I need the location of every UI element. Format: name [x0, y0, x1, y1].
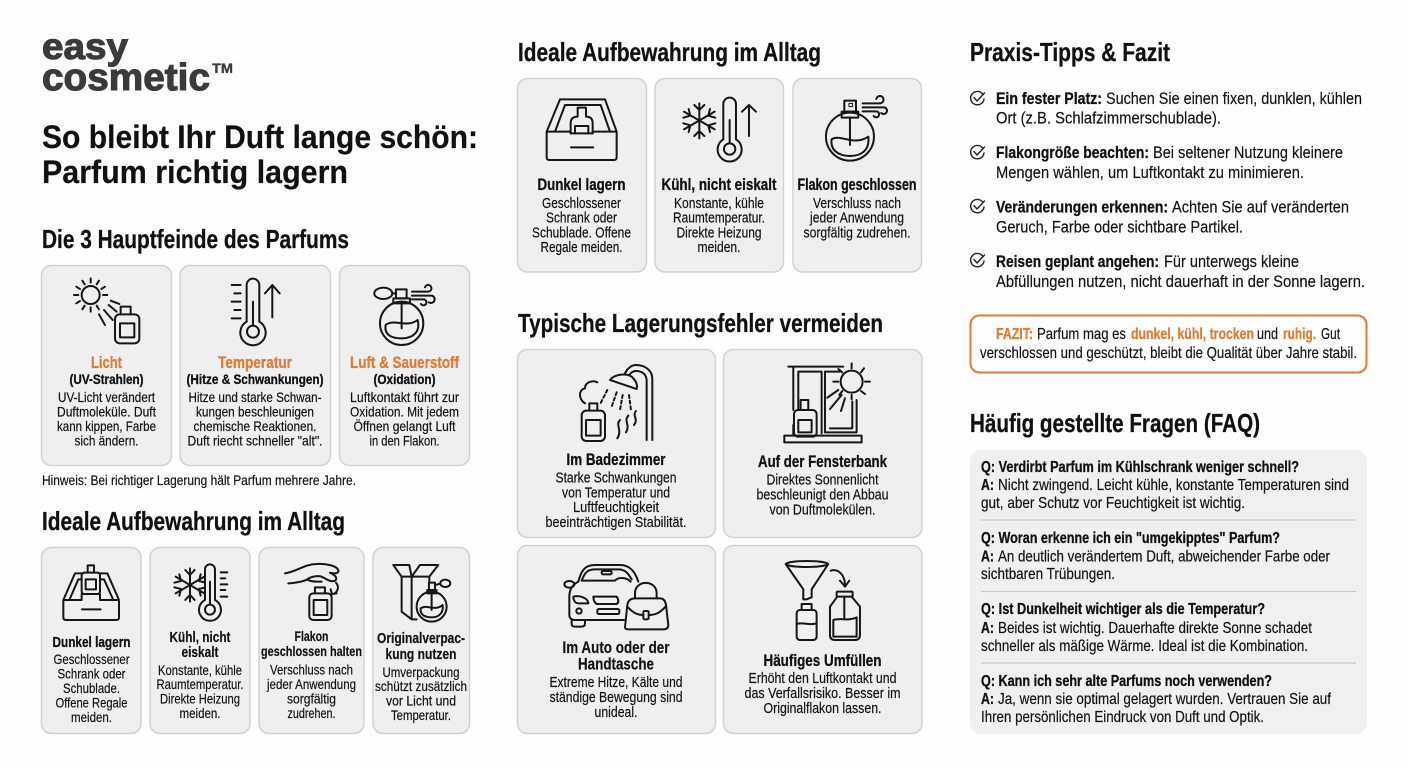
text: Luftkontakt führt zur	[350, 389, 459, 405]
tip: Ein fester Platz	[971, 89, 1362, 128]
heading: Originalverpac-	[377, 630, 465, 647]
icon: car and handbag	[564, 565, 668, 629]
heading: Kühl, nicht eiskalt	[662, 176, 777, 194]
note: Hinweis: Bei richtiger Lagerung hält Parfum mehrere Jahre.	[42, 473, 356, 488]
panel: Licht	[42, 266, 172, 466]
text: in den Flakon.	[370, 432, 440, 448]
text: sorgfältig zudrehen.	[804, 224, 910, 242]
text	[188, 389, 322, 448]
text: schützt zusätzlich	[375, 678, 467, 694]
faq item 2	[981, 530, 1331, 583]
text: meiden.	[71, 709, 112, 725]
faq item 1: Nicht zwingend. Leicht kühle, konstante Temperaturen sind	[998, 477, 1349, 494]
faq item 3: schneller als mäßige Wärme. Ideal ist die Kombination.	[981, 638, 1308, 655]
logo: easy	[42, 26, 128, 67]
tip: Veränderungen: Geruch, Farbe oder sichtbare Partikel.	[996, 218, 1243, 236]
text: Geschlossener	[542, 195, 621, 212]
icon: box and perfume	[393, 565, 450, 622]
faq item 1: A:	[981, 477, 994, 494]
icon: check	[971, 91, 984, 105]
text	[756, 472, 888, 518]
text: jeder Anwendung	[809, 210, 904, 226]
text: Extreme Hitze, Kälte und	[550, 674, 682, 691]
text: Regale meiden.	[540, 239, 622, 256]
faq item 2: An deutlich verändertem Duft, abweichender Farbe oder	[998, 548, 1331, 566]
heading: Handtasche	[578, 654, 654, 674]
text: zudrehen.	[288, 705, 336, 721]
text: von Temperatur und	[562, 484, 670, 502]
icon: shower and bottle	[580, 365, 652, 441]
text: Umverpackung	[382, 664, 460, 680]
panel: Originalverpackung nutzen	[373, 548, 470, 734]
text	[673, 195, 765, 256]
faq item 4	[981, 673, 1331, 726]
icon: check	[971, 199, 984, 213]
text: Direkte Heizung	[676, 224, 762, 242]
faq item 4: A:	[981, 691, 994, 708]
faq item 2: sichtbaren Trübungen.	[981, 566, 1115, 583]
text: sorgfältig	[287, 690, 336, 706]
panel: Dunkel lagern middle	[518, 78, 646, 272]
icon: snowflake and thermometer	[174, 564, 227, 621]
text: Oxidation. Mit jedem	[350, 404, 459, 420]
tip: Reisen	[971, 252, 1365, 291]
text: Konstante, kühle	[158, 662, 242, 678]
heading	[261, 628, 362, 659]
faq item 1: gut, aber Schutz vor Feuchtigkeit ist wichtig.	[981, 495, 1245, 512]
panel: Kühl, nicht eiskalt	[150, 548, 250, 734]
panel: Auf der Fensterbank	[724, 350, 922, 538]
text: vor Licht und	[386, 692, 456, 708]
heading: Die 3 Hauptfeinde: Die 3 Hauptfeinde des Parfums	[42, 224, 349, 254]
text: Offene Regale	[56, 694, 128, 710]
panel: FAQ	[970, 450, 1367, 734]
subheading: (Hitze & Schwankungen)	[186, 371, 324, 387]
faq item 4: Ja, wenn sie optimal gelagert wurden. Vertrauen Sie auf	[998, 691, 1331, 708]
text: Starke Schwankungen	[556, 470, 676, 486]
faq item 3: A:	[981, 620, 994, 637]
icon: check	[971, 253, 984, 267]
text	[532, 195, 631, 256]
tip: Flakongröße	[971, 143, 1343, 182]
panel: Flakon geschlossen	[793, 78, 922, 272]
text: Öffnen gelangt Luft	[354, 417, 456, 434]
faq item 1	[981, 459, 1349, 512]
heading: Dunkel lagern	[52, 634, 130, 651]
heading: Licht: Licht	[91, 354, 122, 372]
faq item 2: Q: Woran erkenne ich ein "umgekipptes" Parfum?	[981, 530, 1280, 547]
text	[375, 664, 467, 723]
text	[54, 651, 130, 725]
heading: Ideale Aufbewahrung left: Ideale Aufbewahrung im Alltag	[42, 506, 345, 536]
tip: Ein fester Platz: Suchen Sie einen fixen, dunklen, kühlen	[1106, 89, 1362, 108]
text	[546, 470, 686, 531]
subheading: (Oxidation)	[374, 371, 436, 387]
icon: hand closing bottle	[285, 564, 338, 620]
title: Parfum richtig lagern	[42, 154, 348, 190]
heading: Im Badezimmer	[566, 450, 666, 469]
text: Schrank oder	[58, 666, 126, 682]
heading: kung nutzen	[386, 646, 456, 663]
text: Verschluss nach	[813, 195, 901, 212]
heading: Kühl, nicht	[170, 629, 230, 646]
callout: Fazit	[970, 316, 1366, 372]
heading: Praxis-Tipps: Praxis-Tipps & Fazit	[970, 37, 1170, 67]
heading: Auf der Fensterbank	[758, 452, 887, 471]
icon: sun and bottle	[74, 278, 139, 343]
text: sich ändern.	[74, 432, 138, 448]
text: Schrank oder	[546, 210, 617, 226]
text	[266, 662, 356, 721]
heading	[562, 638, 670, 674]
text: Direktes Sonnenlicht	[766, 472, 879, 488]
heading: Dunkel lagern	[538, 176, 626, 194]
faq item 4: Ihren persönlichen Eindruck von Duft und Optik.	[981, 709, 1264, 726]
icon: window sill with sun	[784, 363, 870, 442]
text: meiden.	[180, 705, 220, 721]
text: ständige Bewegung sind	[550, 689, 682, 706]
faq item 3: Q: Ist Dunkelheit wichtiger als die Temperatur?	[981, 601, 1265, 618]
heading: Häufiges Umfüllen	[764, 651, 882, 670]
subheading: (UV-Strahlen)	[70, 371, 144, 387]
callout: Fazit: Gut	[1321, 326, 1340, 343]
text: Erhöht den Luftkontakt und	[748, 670, 896, 687]
text: das Verfallsrisiko. Besser im	[744, 685, 900, 702]
text	[804, 195, 910, 242]
tip: Flakongröße: Bei seltener Nutzung kleinere	[1153, 143, 1343, 162]
title: So bleibt Ihr Duft lange schön:	[42, 119, 478, 155]
panel: Flakon geschlossen halten	[259, 548, 364, 734]
text: UV-Licht verändert	[58, 389, 155, 405]
text: meiden.	[698, 239, 740, 256]
text: kungen beschleunigen	[196, 404, 314, 420]
heading: Flakon geschlossen	[798, 176, 916, 194]
text: von Duftmolekülen.	[770, 502, 876, 518]
heading: Flakon	[294, 628, 328, 644]
text	[57, 389, 156, 448]
heading: eiskalt	[182, 644, 219, 661]
panel: Luft und Sauerstoff	[340, 266, 470, 466]
faq item 3	[981, 601, 1312, 655]
panel: Temperatur	[180, 266, 330, 466]
text: kann kippen, Farbe	[57, 418, 156, 434]
logo	[42, 26, 233, 99]
text: Duft riecht schneller "alt".	[188, 432, 322, 448]
tip: Flakongröße: Mengen wählen, um Luftkontakt zu minimieren.	[996, 163, 1304, 182]
callout: Fazit: dunkel, kühl, trocken	[1131, 326, 1254, 343]
text: jeder Anwendung	[266, 676, 356, 692]
logo: cosmetic	[42, 57, 210, 99]
text	[350, 389, 459, 448]
text: Verschluss nach	[270, 662, 353, 678]
faq item 2: A:	[981, 548, 994, 566]
tip: Ein fester Platz: Ein fester Platz:	[996, 89, 1102, 108]
callout: Fazit: FAZIT:	[996, 326, 1033, 343]
heading: Temperatur: Temperatur	[218, 354, 292, 372]
icon: thermometer rising	[232, 279, 280, 345]
panel: Im Auto oder der Handtasche	[518, 546, 716, 734]
text: Schublade. Offene	[532, 224, 631, 242]
text: Duftmoleküle. Duft	[57, 404, 156, 420]
panel: Im Badezimmer	[518, 350, 716, 538]
text: chemische Reaktionen.	[194, 418, 316, 434]
icon: perfume with airflow	[826, 96, 887, 161]
tip: Reisen: Für unterwegs kleine	[1164, 252, 1299, 271]
panel: Dunkel lagern	[42, 548, 141, 734]
heading: Im Auto oder der	[562, 638, 670, 657]
text: unideal.	[594, 704, 638, 721]
icon: snowflake thermometer arrow	[683, 98, 756, 162]
heading: geschlossen halten	[261, 643, 362, 659]
tip: Flakongröße: Flakongröße beachten:	[996, 143, 1149, 162]
tip: Ein fester Platz: Ort (z.B. Schlafzimmerschublade).	[996, 108, 1221, 128]
faq item 3: Beides ist wichtig. Dauerhafte direkte Sonne schadet	[998, 620, 1312, 637]
text: Raumtemperatur.	[673, 210, 765, 226]
heading: Ideale Aufbewahrung middle: Ideale Aufbewahrung im Alltag	[518, 37, 821, 67]
panel: Häufiges Umfüllen	[724, 546, 922, 734]
heading	[377, 630, 465, 663]
text: Konstante, kühle	[674, 195, 764, 212]
text: Hitze und starke Schwan-	[188, 389, 322, 405]
text: beeinträchtigen Stabilität.	[546, 514, 686, 531]
callout: Fazit: Parfum mag es	[1037, 326, 1126, 343]
icon: drawer with bottle	[547, 99, 617, 160]
text: Raumtemperatur.	[156, 676, 244, 692]
text: Temperatur.	[391, 707, 451, 723]
logo: TM	[212, 60, 233, 76]
text: Schublade.	[63, 680, 120, 696]
panel: Kühl, nicht eiskalt middle	[655, 78, 784, 272]
text: Geschlossener	[54, 651, 130, 667]
tip: Veränderungen: Achten Sie auf veränderten	[1172, 198, 1349, 216]
icon: perfume atomizer	[374, 285, 435, 345]
text	[744, 670, 900, 717]
text: Originalflakon lassen.	[764, 700, 882, 717]
tip: Veränderungen	[971, 198, 1349, 236]
text	[156, 662, 244, 721]
title	[42, 119, 478, 190]
text: Luftfeuchtigkeit	[573, 499, 660, 516]
heading: FAQ: Häufig gestellte Fragen (FAQ)	[970, 408, 1260, 438]
tip: Reisen: Reisen geplant angehen:	[996, 252, 1159, 271]
tip: Veränderungen: Veränderungen erkennen:	[996, 198, 1168, 216]
icon: funnel and bottles	[786, 561, 860, 640]
faq item 4: Q: Kann ich sehr alte Parfums noch verwenden?	[981, 673, 1272, 690]
callout: Fazit: ruhig.	[1283, 326, 1316, 343]
text: Direkte Heizung	[160, 690, 240, 706]
icon: check	[971, 145, 984, 159]
text: beschleunigt den Abbau	[756, 486, 888, 504]
icon: drawer with bottle	[63, 565, 119, 620]
callout: Fazit: und	[1257, 326, 1278, 343]
heading	[170, 629, 230, 661]
text	[550, 674, 682, 721]
faq item 1: Q: Verdirbt Parfum im Kühlschrank weniger schnell?	[981, 459, 1299, 476]
heading: Luft und Sauerstoff: Luft & Sauerstoff	[350, 354, 459, 372]
heading: Lagerungsfehler: Typische Lagerungsfehler vermeiden	[518, 308, 883, 338]
